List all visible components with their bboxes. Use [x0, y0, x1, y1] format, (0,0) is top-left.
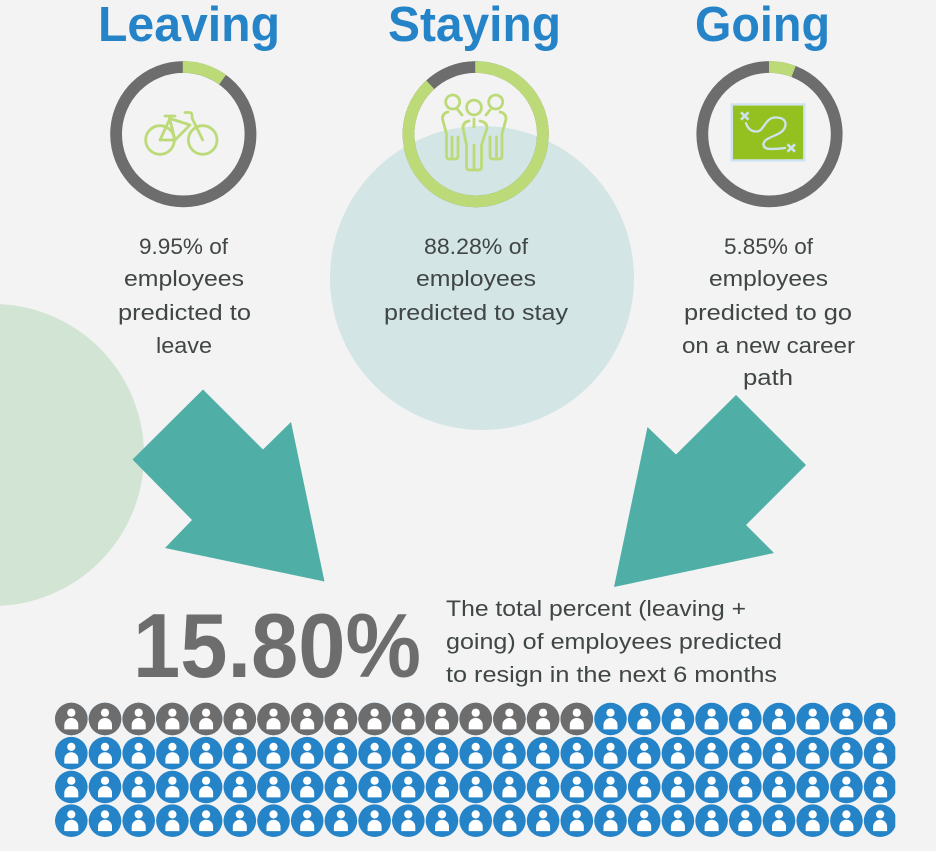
- icon: map: [732, 104, 804, 160]
- text: leaving: employees: [124, 266, 244, 291]
- text: going: [682, 234, 855, 390]
- text: staying: [384, 234, 568, 325]
- row 1: [55, 703, 896, 735]
- icon: three people: [442, 95, 506, 170]
- big number: 15.80%: [133, 596, 421, 697]
- icon: bicycle: [146, 112, 217, 154]
- row 3: [55, 771, 896, 803]
- text: going: on a new career: [682, 333, 855, 358]
- donut: staying 88.28%: [408, 67, 543, 201]
- row 2: [55, 737, 896, 770]
- text: leaving: [118, 234, 251, 358]
- text: staying: 88.28% of: [424, 234, 529, 259]
- decorative circle: left: [0, 304, 144, 606]
- decorative circle: centre: [330, 126, 634, 430]
- text: leaving: predicted to: [118, 300, 251, 325]
- text: total description: going) of employees predicted: [446, 629, 782, 654]
- donut: going 5.85%: [702, 67, 837, 201]
- text: going: 5.85% of: [724, 234, 814, 259]
- text: staying: employees: [416, 266, 536, 291]
- text: total description: to resign in the next 6 months: [446, 662, 777, 687]
- text: total description: The total percent (leaving +: [446, 596, 746, 621]
- row 4: [55, 804, 896, 837]
- people grid: 16 grey of 100: [55, 703, 896, 837]
- donut: leaving 9.95%: [116, 67, 250, 201]
- text: staying: predicted to stay: [384, 300, 568, 325]
- text: total description: [446, 596, 782, 687]
- text: going: employees: [709, 266, 828, 291]
- text: leaving: 9.95% of: [139, 234, 229, 259]
- arrow: right, pointing down-left: [614, 395, 806, 587]
- arrow: left, pointing down-right: [132, 390, 324, 582]
- text: going: path: [743, 365, 793, 390]
- text: going: predicted to go: [684, 300, 852, 325]
- text: leaving: leave: [156, 333, 212, 358]
